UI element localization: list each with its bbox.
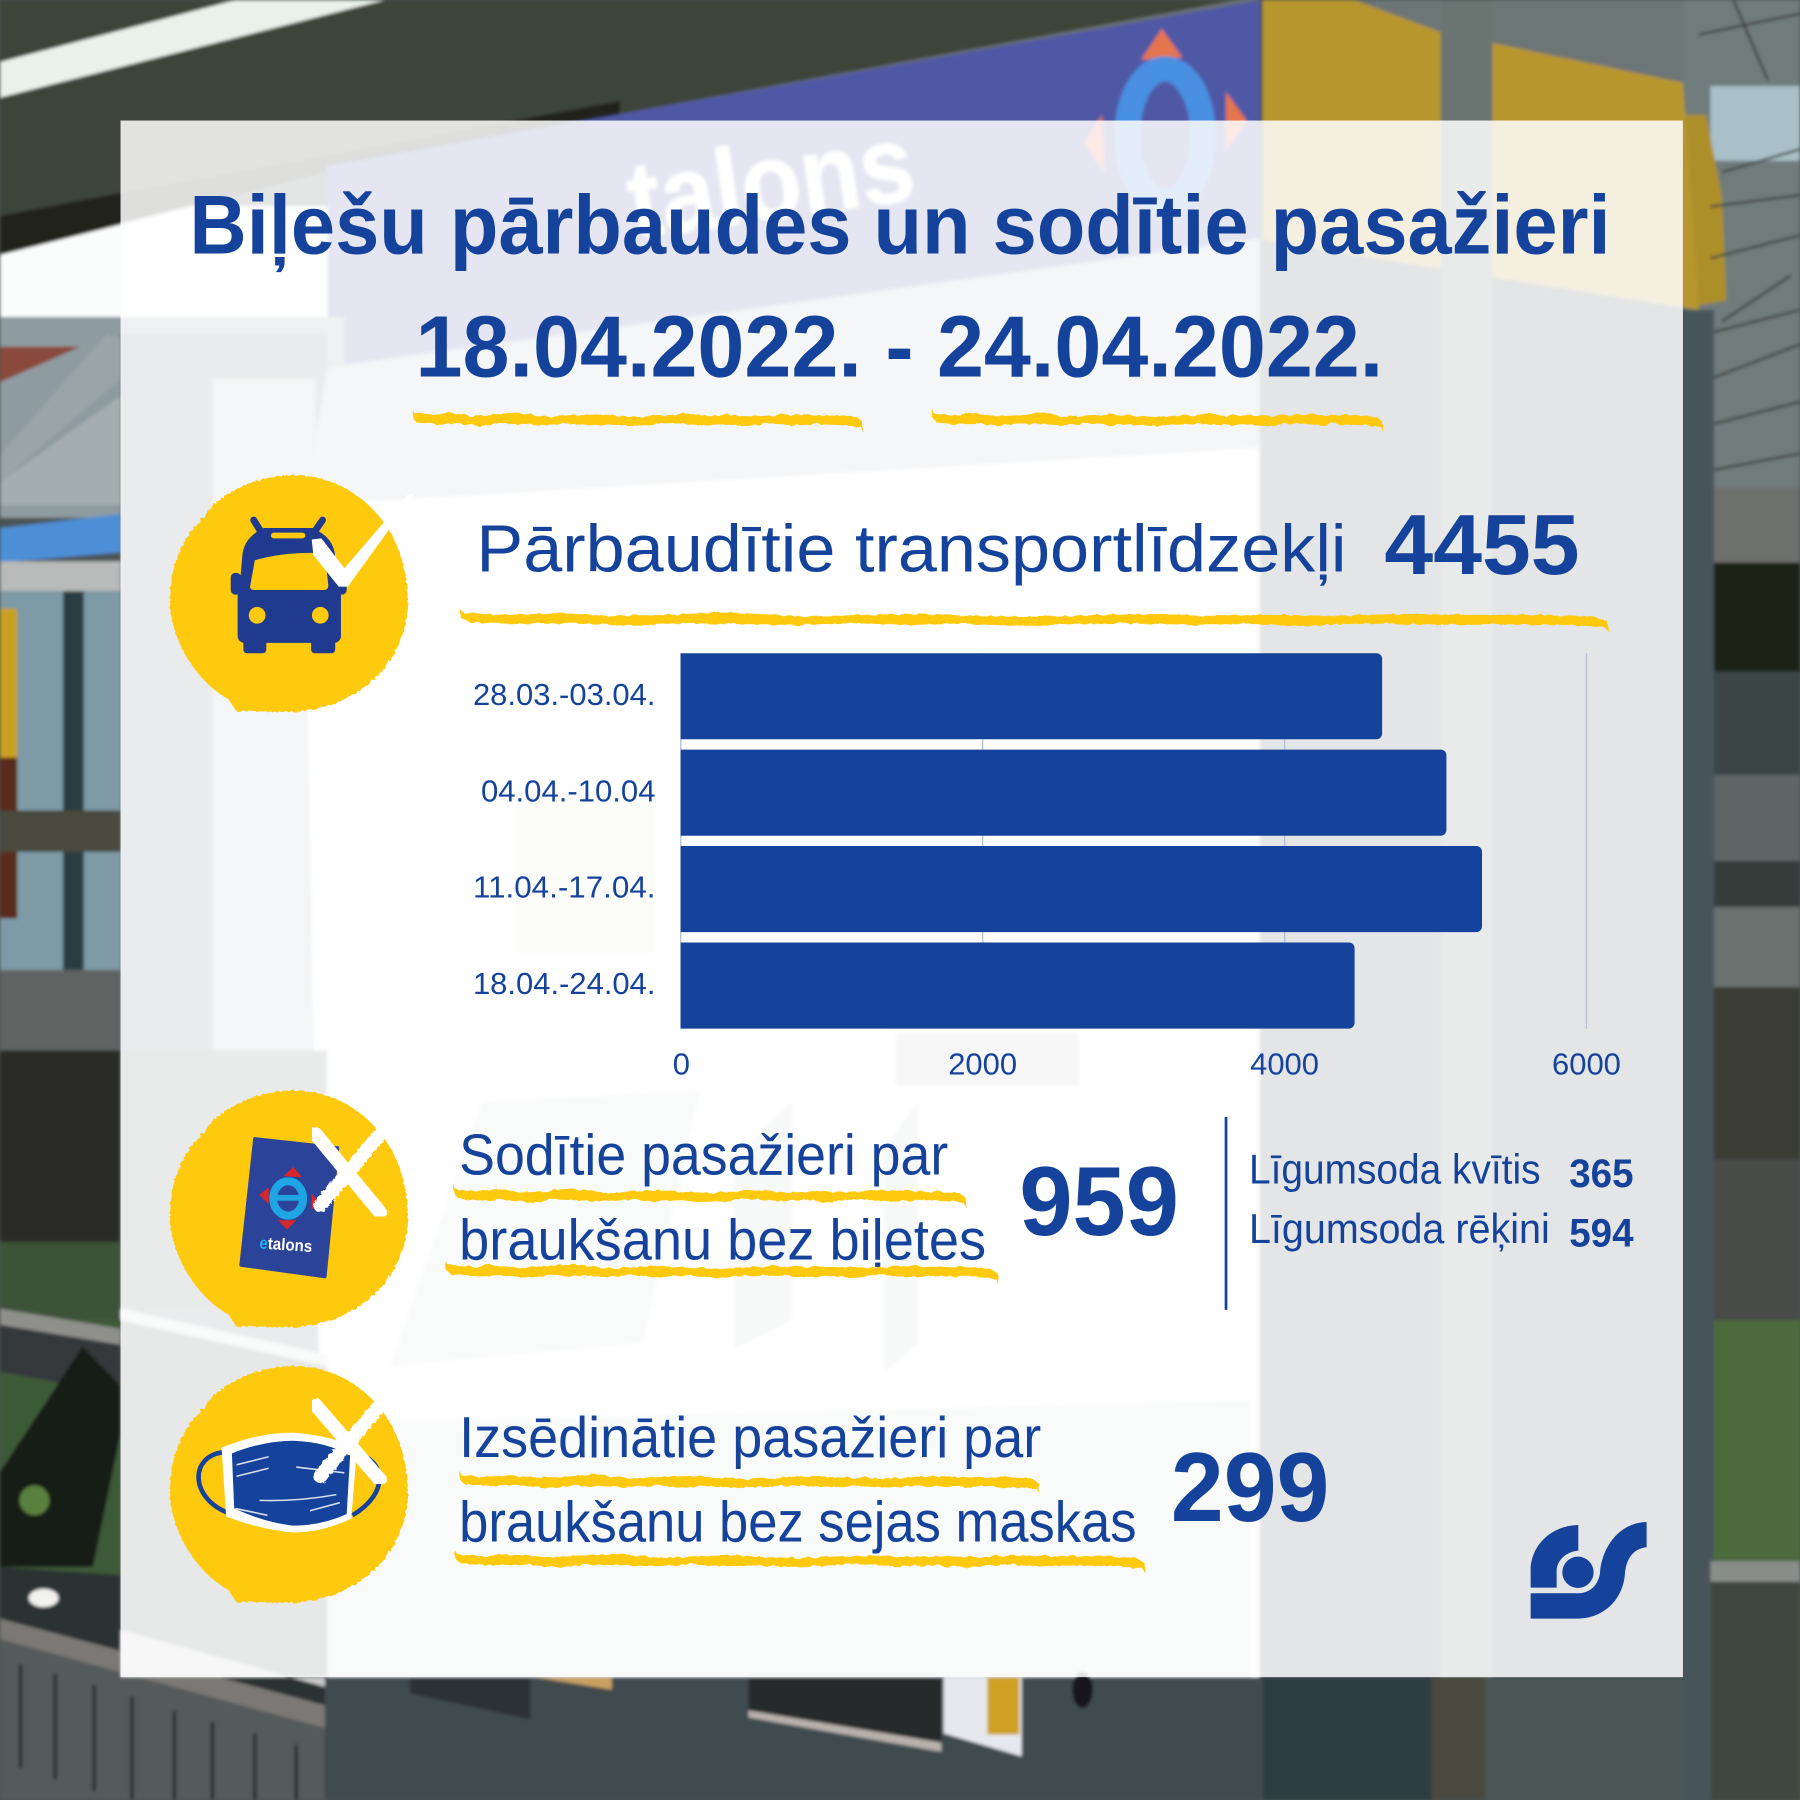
text: removed passengers xyxy=(459,1406,1136,1555)
value: 4455: 4455 xyxy=(1384,497,1580,592)
heading: inspected vehicles: Pārbaudītie transportlīdzekļi xyxy=(476,513,1347,587)
text: fined passengers: braukšanu bez biļetes xyxy=(459,1208,986,1272)
value: 299: 299 xyxy=(1171,1432,1329,1542)
bar chart: 28.03.-03.04. xyxy=(473,677,655,712)
logo xyxy=(1531,1522,1647,1619)
breakdown of fines: 365 xyxy=(1569,1151,1634,1196)
bar chart: 18.04.-24.04. xyxy=(473,966,655,1001)
title: 18.04.2022. - 24.04.2022. xyxy=(416,299,1383,396)
underlines: removed passengers xyxy=(455,1471,1146,1574)
divider line xyxy=(1225,1117,1227,1310)
bar chart: 04.04.-10.04 xyxy=(481,773,655,808)
text: fined passengers xyxy=(459,1123,986,1272)
breakdown of fines: 594 xyxy=(1569,1211,1634,1256)
breakdown of fines xyxy=(1249,1147,1634,1256)
breakdown of fines: Līgumsoda kvītis xyxy=(1249,1147,1541,1193)
background photo: ticket machine at a stop: talons xyxy=(620,102,921,263)
translucent white panel xyxy=(121,121,1683,1677)
underline: inspected vehicles xyxy=(459,608,1609,632)
icon: e-talons card with cross xyxy=(170,1090,408,1327)
value: 959: 959 xyxy=(1019,1146,1179,1256)
bar chart: 0 xyxy=(673,1046,690,1081)
icon: bus with check mark xyxy=(170,475,415,712)
text: removed passengers: Izsēdinātie pasažieri par xyxy=(459,1406,1041,1470)
bar chart xyxy=(473,653,1621,1081)
bar chart: 2000 xyxy=(948,1046,1017,1081)
title: Biļešu pārbaudes un sodītie pasažieri xyxy=(189,178,1611,273)
breakdown of fines: Līgumsoda rēķini xyxy=(1249,1206,1550,1252)
text: fined passengers: Sodītie pasažieri par xyxy=(459,1123,948,1187)
title xyxy=(189,178,1611,396)
bar chart: 11.04.-17.04. xyxy=(473,870,655,905)
bar chart: 6000 xyxy=(1552,1046,1621,1081)
bar chart: 4000 xyxy=(1250,1046,1319,1081)
title underlines xyxy=(412,409,1383,433)
icon: face mask with cross xyxy=(170,1366,408,1603)
text: removed passengers: braukšanu bez sejas maskas xyxy=(459,1491,1136,1555)
icon: e-talons card with cross: etalons xyxy=(259,1233,313,1256)
underlines: fined passengers xyxy=(445,1185,999,1284)
